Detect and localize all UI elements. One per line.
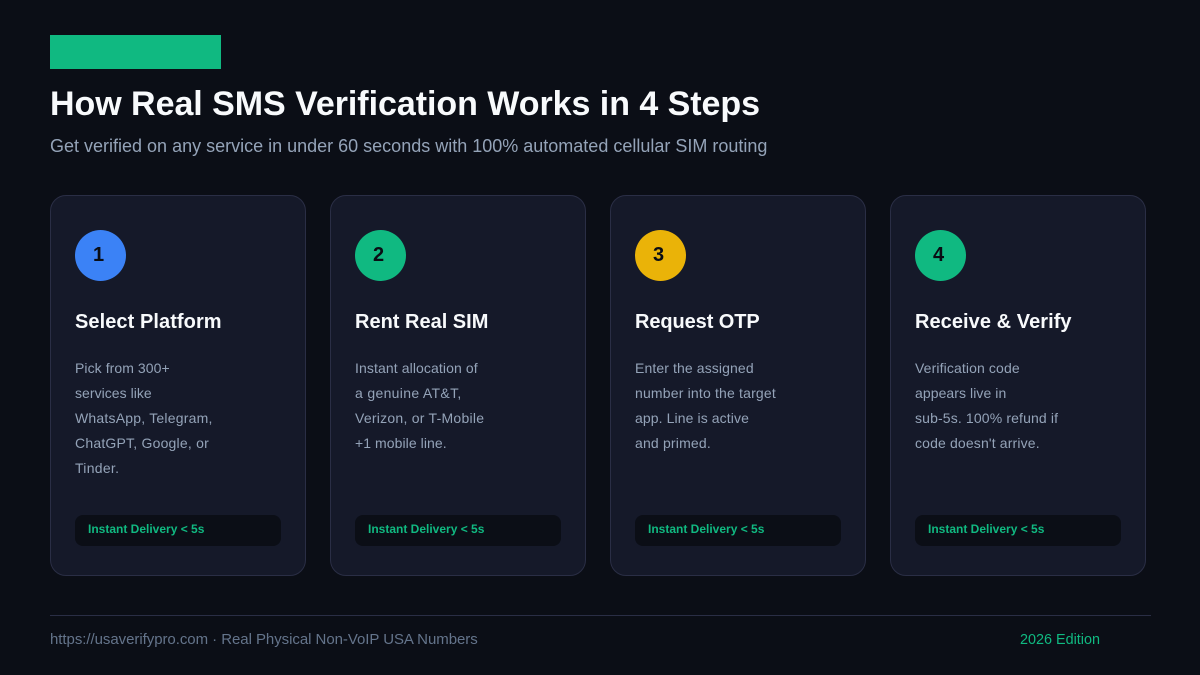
step 4 description: sub-5s. 100% refund if <box>915 410 1058 426</box>
step 2 badge: Instant Delivery < 5s <box>368 522 484 536</box>
panel: step 3 <box>610 195 866 576</box>
step 1 description: ChatGPT, Google, or <box>75 435 209 451</box>
step 4 heading: Receive & Verify <box>915 311 1072 333</box>
step 1 badge: Instant Delivery < 5s <box>88 522 204 536</box>
step number 3 <box>635 230 686 281</box>
step 4 badge <box>915 515 1121 546</box>
step 1 heading: Select Platform <box>75 311 222 333</box>
step 1 badge <box>75 515 281 546</box>
step 2 description: Instant allocation of <box>355 360 478 376</box>
step number 2 <box>355 230 406 281</box>
step 3 description: number into the target <box>635 385 776 401</box>
step 2 description: Verizon, or T-Mobile <box>355 410 484 426</box>
panel: step 2 <box>330 195 586 576</box>
step 3 badge: Instant Delivery < 5s <box>648 522 764 536</box>
step number 1 <box>75 230 126 281</box>
step 4 description: code doesn't arrive. <box>915 435 1040 451</box>
panel: step 4 <box>890 195 1146 576</box>
footer source: https://usaverifypro.com · Real Physical Non-VoIP USA Numbers <box>50 631 478 648</box>
step number 1: 1 <box>93 244 104 266</box>
step 3 description: app. Line is active <box>635 410 749 426</box>
step number 4 <box>915 230 966 281</box>
step 3 description: and primed. <box>635 435 711 451</box>
step 4 description: appears live in <box>915 385 1006 401</box>
step 1 description: WhatsApp, Telegram, <box>75 410 213 426</box>
step 3 description <box>635 360 776 451</box>
step 1 description: services like <box>75 385 152 401</box>
step 4 badge: Instant Delivery < 5s <box>928 522 1044 536</box>
footer edition: 2026 Edition <box>1020 632 1100 648</box>
step 2 description: a genuine AT&T, <box>355 385 462 401</box>
subtitle: Get verified on any service in under 60 seconds with 100% automated cellular SIM routing <box>50 136 767 156</box>
step 1 description: Tinder. <box>75 460 119 476</box>
step 2 description: +1 mobile line. <box>355 435 447 451</box>
step 4 description <box>915 360 1058 451</box>
title: How Real SMS Verification Works in 4 Steps <box>50 85 760 123</box>
step 3 badge <box>635 515 841 546</box>
panel: step 1 <box>50 195 306 576</box>
step 2 badge <box>355 515 561 546</box>
accent bar <box>50 35 221 69</box>
step number 4: 4 <box>933 244 944 266</box>
step 1 description: Pick from 300+ <box>75 360 170 376</box>
step number 2: 2 <box>373 244 384 266</box>
step 2 description <box>355 360 484 451</box>
step 1 description <box>75 360 213 476</box>
step 2 heading: Rent Real SIM <box>355 311 488 333</box>
step number 3: 3 <box>653 244 664 266</box>
step 3 description: Enter the assigned <box>635 360 754 376</box>
step 3 heading: Request OTP <box>635 311 760 333</box>
step 4 description: Verification code <box>915 360 1020 376</box>
